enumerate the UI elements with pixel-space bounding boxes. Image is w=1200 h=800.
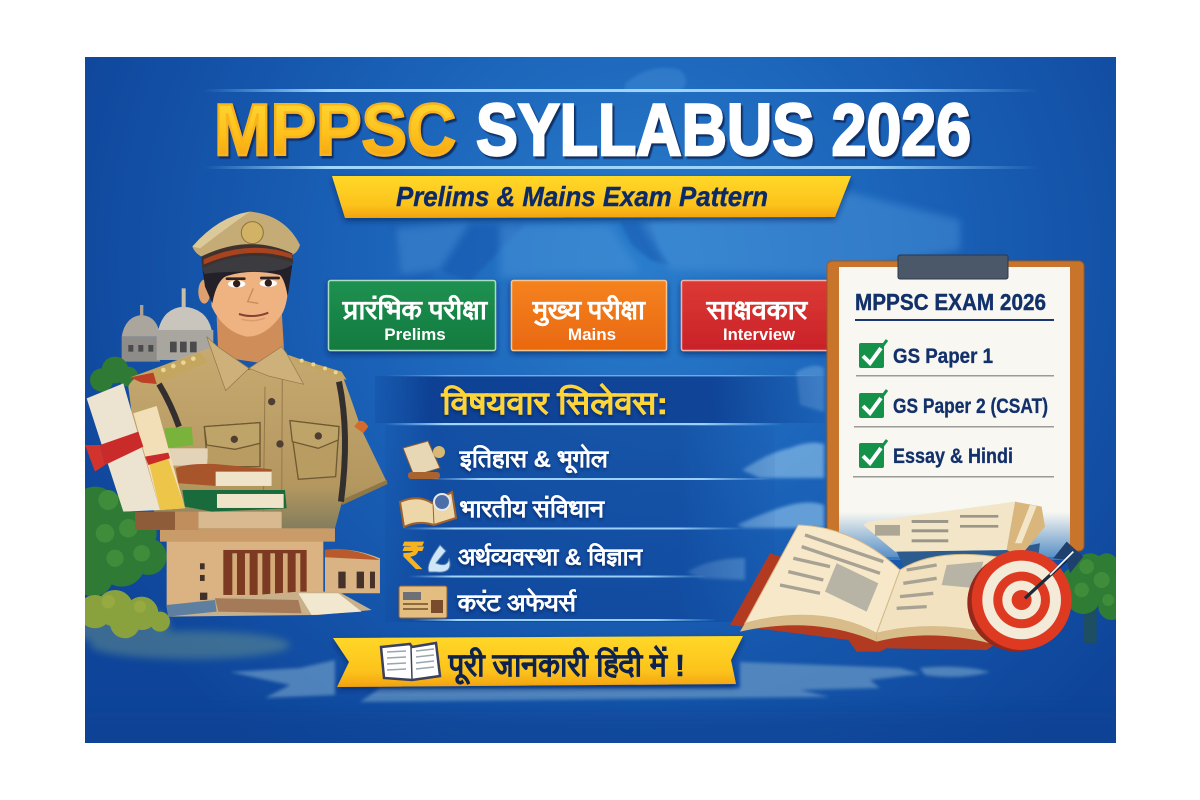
row: history and geography <box>403 441 772 480</box>
head <box>198 265 292 337</box>
button: interview: साक्षवकार <box>706 297 809 325</box>
button: mains: Mains <box>568 325 616 344</box>
collar <box>207 337 304 391</box>
row: economy and science <box>402 535 708 578</box>
peaked cap <box>192 212 300 274</box>
row: current affairs <box>399 586 717 621</box>
trees <box>85 356 170 638</box>
button: prelims: Prelims <box>384 325 446 344</box>
epaulettes <box>130 353 347 384</box>
subtitle ribbon <box>332 176 851 218</box>
neck <box>216 314 284 362</box>
title: SYLLABUS 2026 <box>476 90 971 171</box>
row: constitution: भारतीय संविधान <box>460 495 605 522</box>
faint India map silhouette <box>390 68 686 282</box>
scrolls with ribbon <box>85 383 185 512</box>
button: interview: Interview <box>723 325 796 344</box>
syllabus panel <box>375 375 825 622</box>
title <box>214 90 971 171</box>
bottom ribbon: पूरी जानकारी हिंदी में ! <box>448 645 685 685</box>
row: constitution <box>400 492 747 530</box>
domes building <box>122 288 213 362</box>
buttons <box>231 398 322 448</box>
row: economy and science: ₹ <box>402 535 424 576</box>
target with arrow <box>967 542 1083 651</box>
parliament building <box>135 512 380 617</box>
sleeve cuff <box>342 480 388 505</box>
checklist item 3 <box>853 440 1054 478</box>
lower clouds <box>230 660 990 702</box>
row: current affairs: करंट अफेयर्स <box>457 587 577 616</box>
subtitle ribbon: Prelims & Mains Exam Pattern <box>396 181 768 212</box>
bottom ribbon <box>333 636 743 687</box>
title: MPPSC <box>214 90 456 171</box>
clouds <box>687 366 824 580</box>
torso and arms <box>128 348 387 533</box>
stage buttons <box>328 280 828 350</box>
row: history and geography: इतिहास & भूगोल <box>459 443 610 474</box>
heading: विषयवार सिलेवस: <box>441 383 668 421</box>
icon: open book <box>381 643 440 680</box>
shoulder straps <box>159 384 179 427</box>
pockets <box>204 421 339 479</box>
row: economy and science: अर्थव्यवस्था & विज्ञान <box>457 543 643 570</box>
button: interview <box>682 280 828 350</box>
sleeve badge <box>354 421 368 433</box>
checklist item 1 <box>856 340 1054 376</box>
clip <box>898 255 1008 279</box>
clipboard <box>827 255 1084 560</box>
button: mains <box>512 280 666 350</box>
button: prelims <box>328 280 496 350</box>
checklist item 1: GS Paper 1 <box>893 345 993 368</box>
checklist item 3: Essay & Hindi <box>893 445 1013 468</box>
button: mains: मुख्य परीक्षा <box>532 296 647 326</box>
officer scene <box>72 212 388 638</box>
checklist item 2 <box>854 390 1054 428</box>
open book <box>730 502 1045 652</box>
checklist item 2: GS Paper 2 (CSAT) <box>893 395 1048 418</box>
book stack <box>164 427 287 512</box>
blue poster background <box>60 57 1140 752</box>
shirt placket <box>263 373 282 513</box>
tree right <box>1064 553 1116 644</box>
button: prelims: प्रारंभिक परीक्षा <box>342 295 489 325</box>
clipboard heading: MPPSC EXAM 2026 <box>855 289 1046 315</box>
